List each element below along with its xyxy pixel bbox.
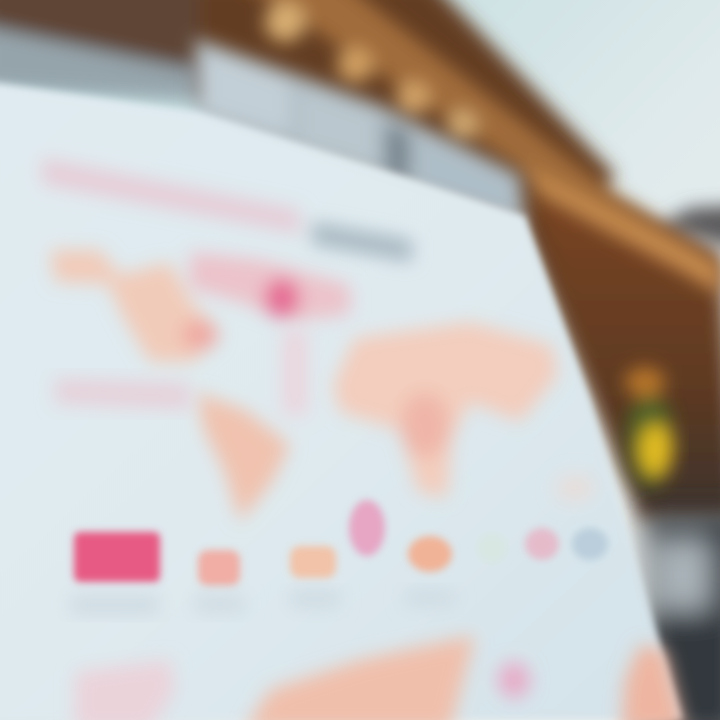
- world map: south america: [196, 330, 307, 522]
- yellow green plant: [625, 367, 674, 488]
- world map: north america: [50, 250, 350, 362]
- swatch: rose: [525, 528, 559, 560]
- legend swatches: [74, 500, 608, 586]
- roof beam with lights: [240, 0, 720, 295]
- swatch: pink: [349, 500, 385, 556]
- lower chart blobs: [75, 635, 685, 720]
- swatch: orange: [408, 536, 452, 572]
- swatch: red: [74, 532, 160, 582]
- swatch: coral: [198, 550, 240, 586]
- map side label: [55, 378, 190, 410]
- swatch: blue: [572, 528, 608, 560]
- swatch: pale green: [477, 533, 507, 563]
- lower right background: [645, 510, 720, 720]
- legend captions: [70, 590, 455, 615]
- window sign: [195, 38, 525, 225]
- building roof and wall: [0, 0, 720, 520]
- poster heading: [42, 158, 412, 262]
- swatch: peach: [290, 546, 336, 578]
- world map: africa and eurasia: [333, 322, 595, 502]
